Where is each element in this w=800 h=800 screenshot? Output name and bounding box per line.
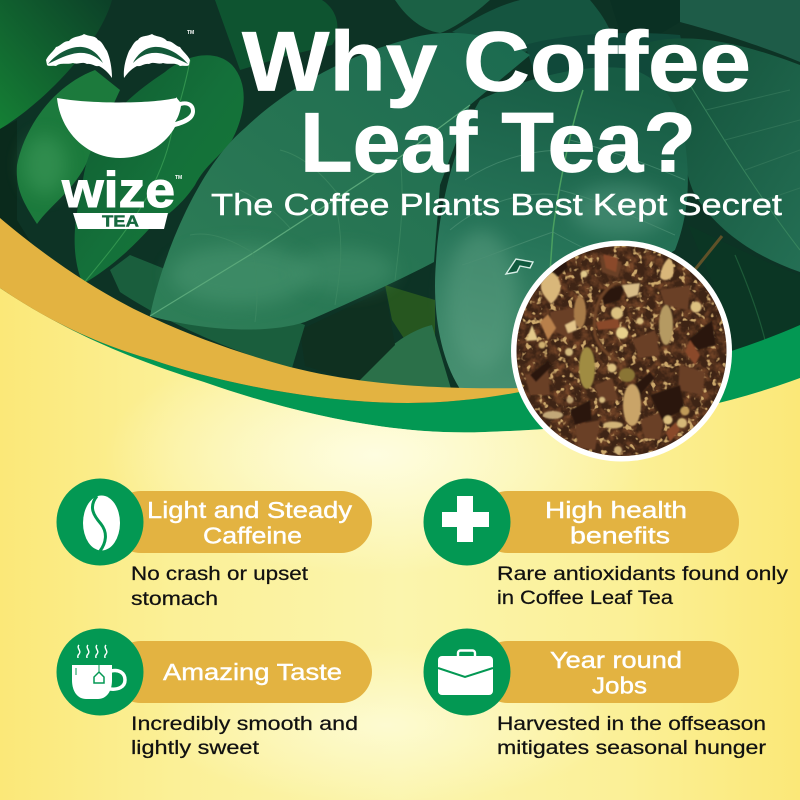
subtitle: The Coffee Plants Best Kept Secret bbox=[211, 188, 783, 222]
wordmark: wize: wize bbox=[61, 162, 175, 218]
description: stomach bbox=[131, 588, 218, 610]
description: Harvested in the offseason bbox=[497, 713, 766, 735]
title: Leaf Tea? bbox=[300, 96, 696, 190]
pill heading bbox=[110, 491, 372, 553]
leaf: top left dark leaf bbox=[0, 0, 112, 129]
description: Rare antioxidants found only bbox=[497, 563, 788, 585]
icon: briefcase bbox=[424, 628, 510, 716]
panel: Amazing Taste bbox=[56, 628, 372, 759]
panel: High health benefits bbox=[424, 478, 788, 609]
title bbox=[242, 14, 751, 190]
description bbox=[131, 563, 309, 610]
green swoosh band bbox=[0, 288, 800, 800]
leaf: center left large leaf bbox=[150, 33, 530, 330]
yellow gradient panel bbox=[0, 280, 800, 800]
trademark marks bbox=[175, 30, 194, 181]
pill heading: High health bbox=[545, 497, 687, 523]
description bbox=[131, 713, 358, 759]
leaf: lower middle foliage bbox=[385, 285, 435, 340]
description: No crash or upset bbox=[131, 563, 309, 585]
description: mitigates seasonal hunger bbox=[497, 737, 767, 759]
background: yellow lower area with green band bbox=[0, 280, 800, 800]
pill heading: benefits bbox=[570, 522, 670, 548]
leaf: right side leaf bbox=[650, 38, 800, 272]
description bbox=[497, 563, 788, 609]
gold swoosh band bbox=[0, 218, 530, 403]
leaf: under leaf bbox=[110, 255, 305, 368]
pill heading: Caffeine bbox=[203, 522, 302, 548]
icon: medical cross bbox=[424, 478, 510, 566]
trademark marks: TM bbox=[187, 30, 194, 36]
leaf: top center leaves bbox=[395, 0, 490, 33]
leaf: logo leaf bbox=[75, 55, 244, 284]
trademark marks: TM bbox=[175, 175, 182, 181]
leaf: small leaf behind logo bbox=[17, 70, 120, 224]
icon: leaf hole bbox=[506, 259, 533, 274]
description: Incredibly smooth and bbox=[131, 713, 358, 735]
icon: left tea leaf bbox=[46, 34, 112, 78]
wordmark plate: TEA: TEA bbox=[102, 214, 139, 230]
icon: coffee bean bbox=[56, 478, 144, 566]
panel: Light and Steady Caffeine bbox=[56, 478, 372, 610]
image: circular tea leaves bbox=[511, 240, 732, 462]
icon: tea cup bbox=[57, 97, 195, 158]
wordmark plate: TEA bbox=[73, 213, 168, 230]
pill heading: Amazing Taste bbox=[163, 659, 342, 685]
description: in Coffee Leaf Tea bbox=[497, 587, 673, 609]
pill heading bbox=[477, 641, 739, 703]
leaf: lower right dark leaf bbox=[688, 225, 800, 352]
pill heading: Jobs bbox=[592, 672, 647, 698]
pill heading: Light and Steady bbox=[147, 497, 352, 523]
icon: right tea leaf bbox=[124, 34, 190, 78]
logo: Wize Tea bbox=[46, 30, 195, 230]
pill heading: Year round bbox=[550, 647, 682, 673]
panel: Year round Jobs bbox=[424, 628, 767, 759]
description: lightly sweet bbox=[131, 737, 260, 759]
pill heading bbox=[477, 491, 739, 553]
title: Why Coffee bbox=[242, 14, 751, 108]
photo: coffee leaves background bbox=[0, 0, 800, 440]
leaf: center right large leaf bbox=[435, 67, 688, 392]
icon: tea cup with tea bag bbox=[56, 628, 144, 716]
pill heading bbox=[110, 641, 372, 703]
description bbox=[497, 713, 767, 759]
